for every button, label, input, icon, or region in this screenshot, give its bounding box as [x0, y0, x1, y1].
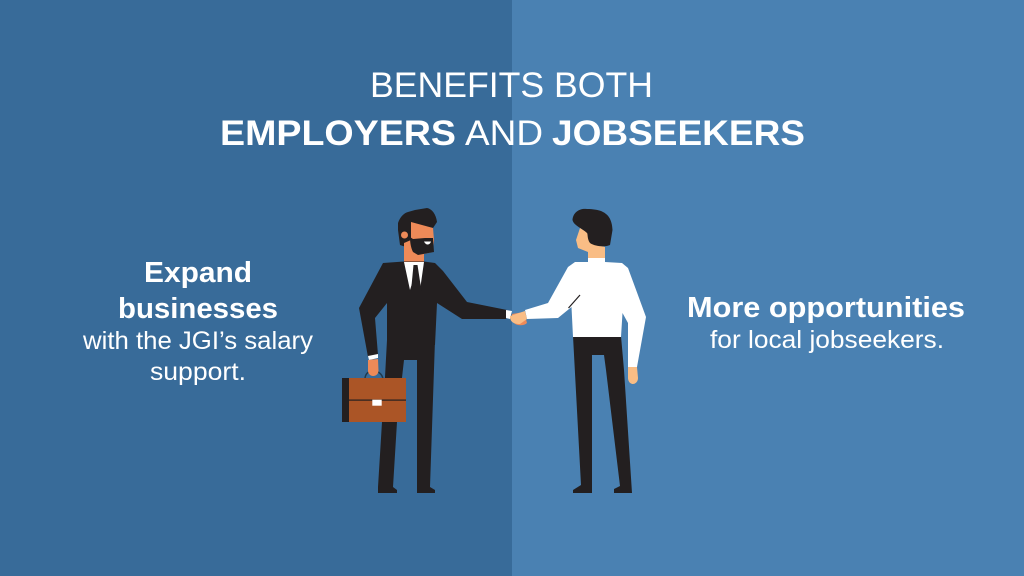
- shirt collar: [404, 262, 424, 290]
- briefcase: [342, 378, 406, 422]
- beard: [410, 237, 434, 255]
- tie: [411, 265, 422, 291]
- cuff: [368, 354, 378, 360]
- smile: [424, 242, 431, 245]
- trousers: [378, 340, 435, 493]
- text block: employer benefit: [82, 257, 314, 386]
- icon: jobseeker in white shirt: [525, 209, 646, 493]
- shirt: [525, 258, 646, 367]
- neck and face: [404, 222, 434, 263]
- trousers: [573, 336, 632, 493]
- ear: [401, 232, 408, 238]
- briefcase handle: [365, 371, 383, 379]
- text block: jobseeker benefit: More opportunities: [687, 292, 965, 324]
- panel: employers background: [0, 0, 512, 576]
- text block: employer benefit: businesses: [118, 293, 278, 325]
- title: EMPLOYERS: [220, 114, 456, 153]
- title: [220, 66, 805, 153]
- hair: [572, 209, 612, 246]
- text block: jobseeker benefit: for local jobseekers.: [710, 326, 944, 354]
- icon: handshake: [506, 310, 527, 325]
- neck and head: [576, 228, 605, 262]
- hand: [628, 367, 638, 384]
- text block: jobseeker benefit: [687, 292, 965, 354]
- title: AND: [465, 114, 543, 153]
- title: BENEFITS BOTH: [370, 66, 653, 105]
- hand holding briefcase: [368, 359, 378, 376]
- jacket: [359, 262, 507, 357]
- text block: employer benefit: with the JGI’s salary: [82, 327, 314, 355]
- hair: [398, 208, 437, 247]
- sleeve crease: [568, 295, 580, 308]
- text block: employer benefit: Expand: [144, 257, 252, 289]
- title: JOBSEEKERS: [552, 114, 805, 153]
- panel: jobseekers background: [512, 0, 1024, 576]
- icon: businessman with briefcase: [342, 208, 507, 493]
- text block: employer benefit: support.: [150, 358, 246, 386]
